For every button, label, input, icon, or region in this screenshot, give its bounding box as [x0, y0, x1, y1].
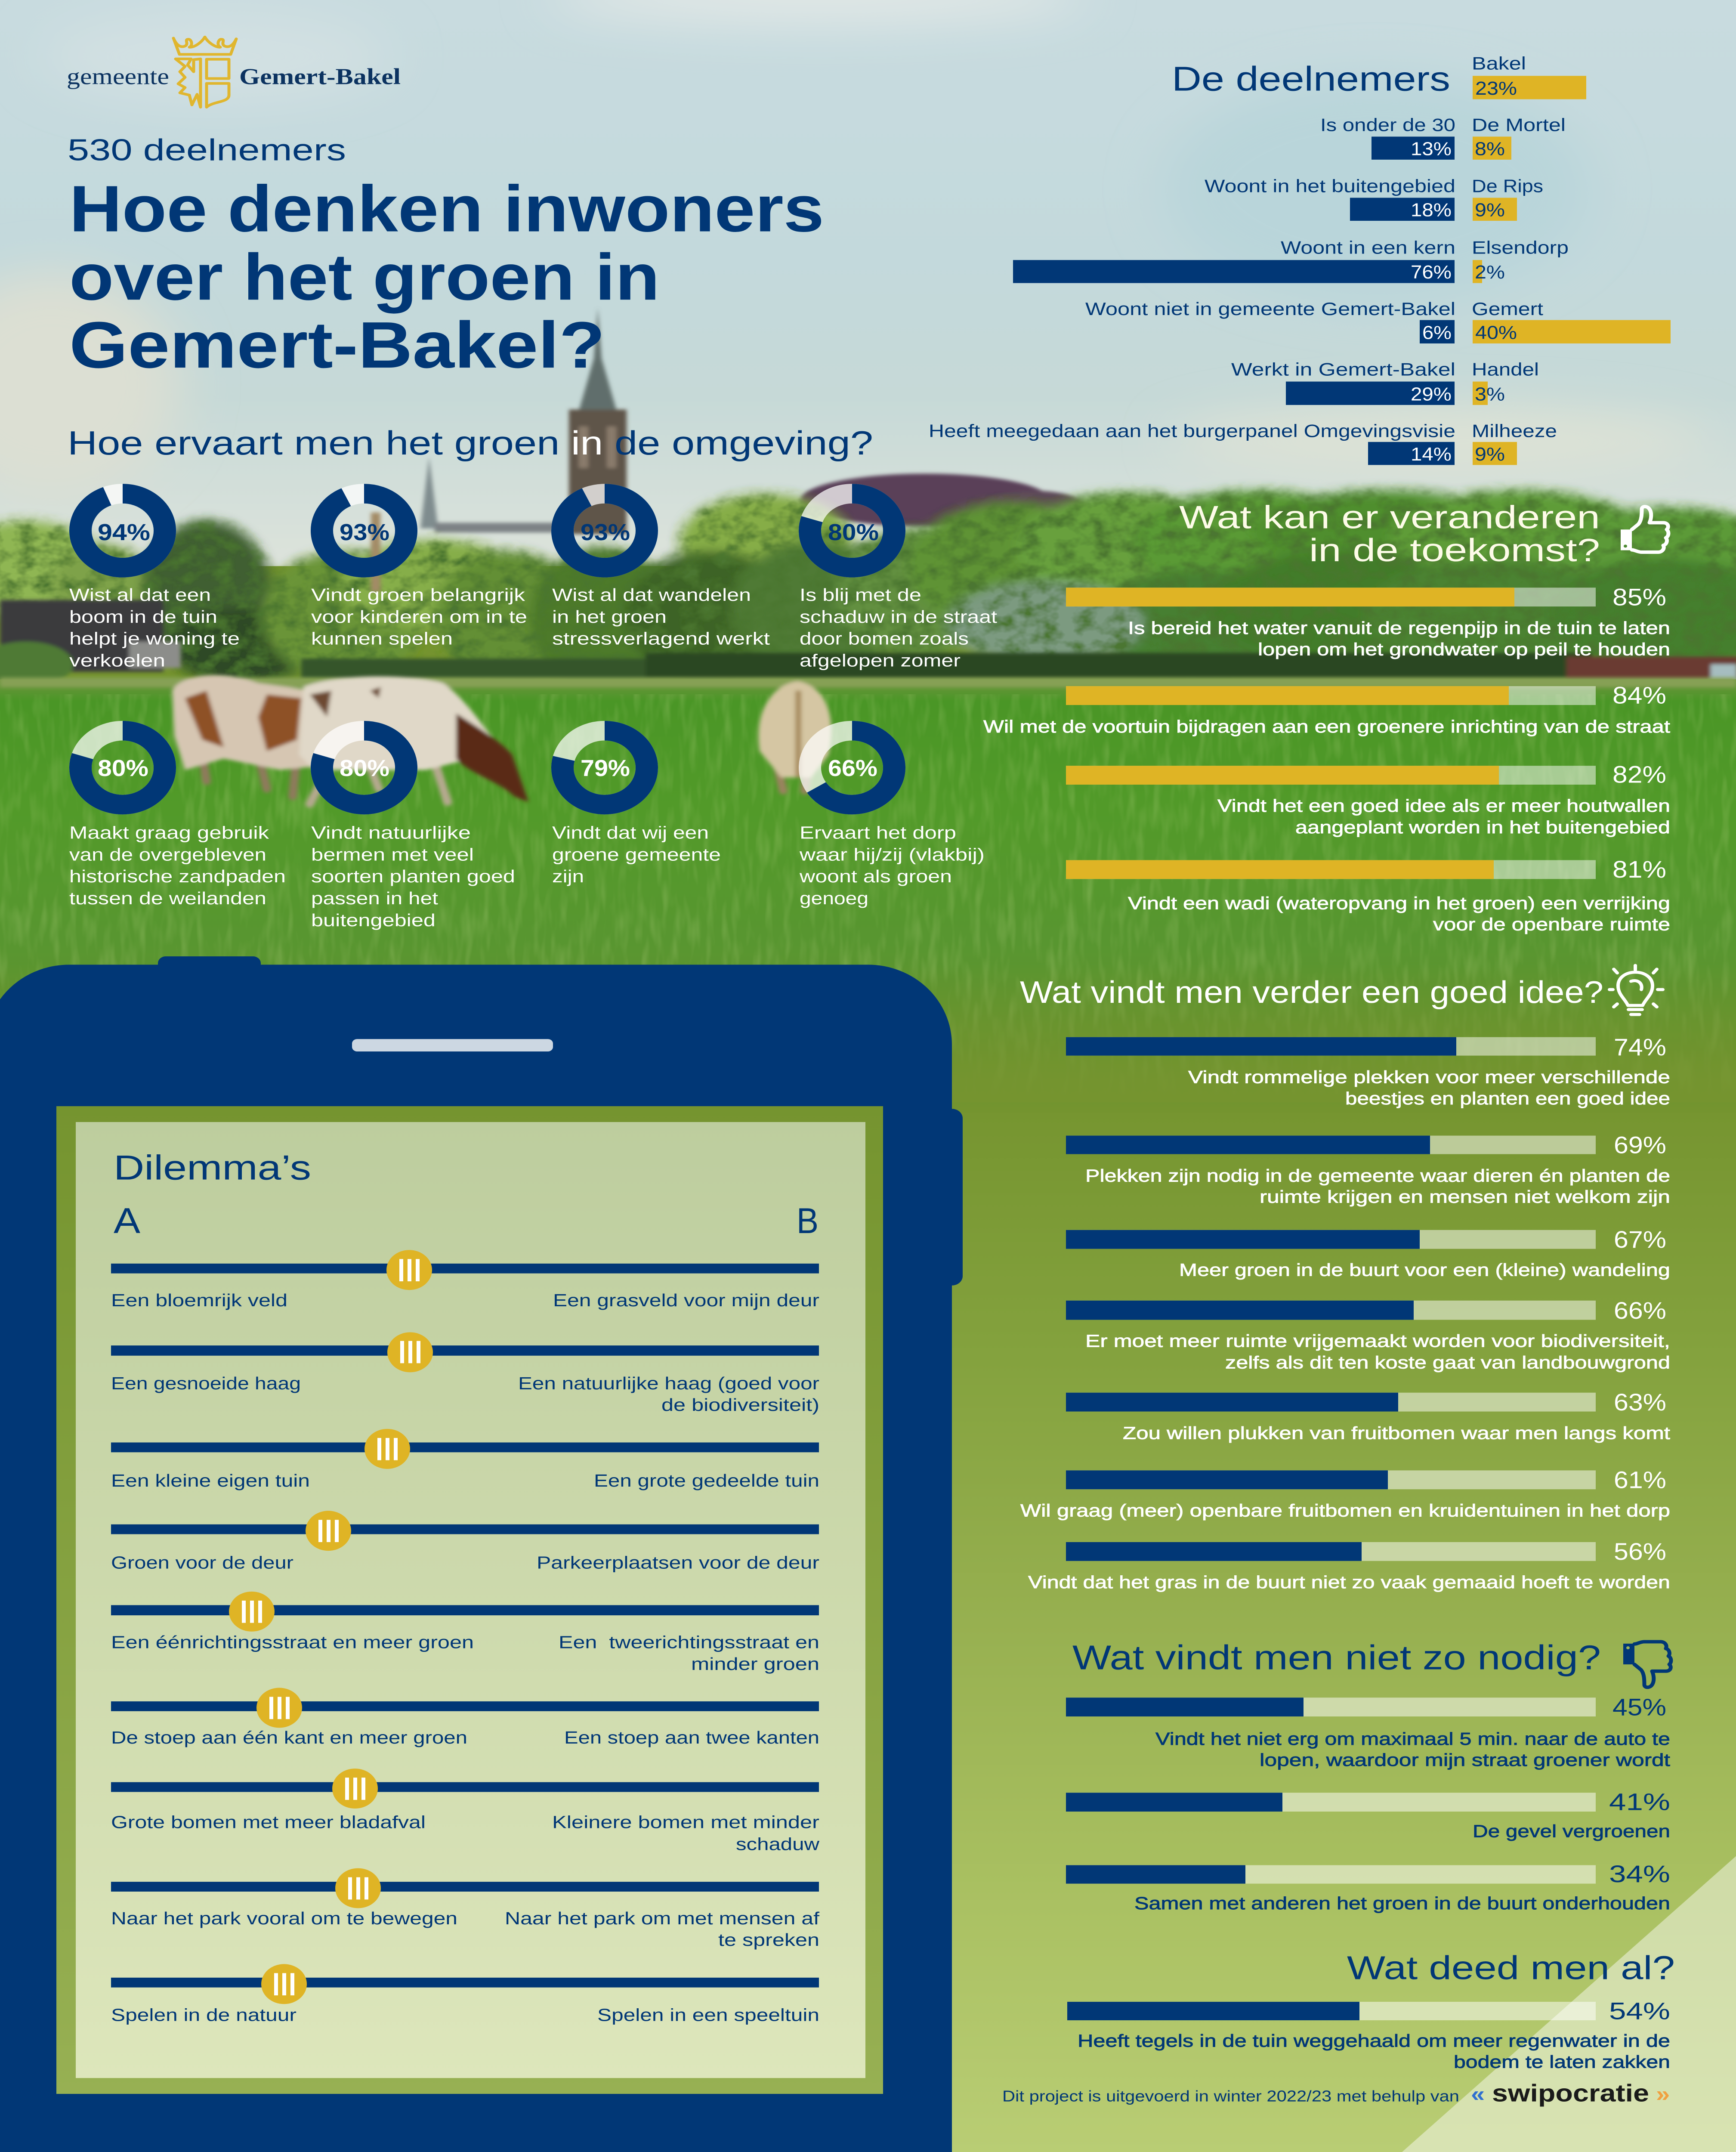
- heading: wat deed men al: Wat deed men al?: [1347, 1949, 1675, 1986]
- donut 79%: [552, 731, 721, 886]
- donut 79%: zijn: [552, 867, 584, 886]
- chart: participant village bars: 23%: [1475, 77, 1517, 99]
- bar 63%: Zou willen plukken van fruitbomen waar men langs komt: [1123, 1423, 1670, 1443]
- slider 1: Een grasveld voor mijn deur: [553, 1291, 819, 1310]
- donut 80% zandpaden: [69, 731, 286, 908]
- bar 85%: Is bereid het water vanuit de regenpijp in de tuin te laten: [1128, 618, 1670, 638]
- panel: wat kan er veranderen: [983, 500, 1670, 934]
- bar 69%: Plekken zijn nodig in de gemeente waar dieren én planten de: [1085, 1166, 1670, 1186]
- background: light triangle bottom right: [1402, 1856, 1736, 2152]
- bar 67%: [1066, 1226, 1670, 1280]
- subtitle: 530 deelnemers: 530 deelnemers: [68, 133, 346, 167]
- donut 80% bermen: [311, 731, 515, 930]
- chart: participant village bars: De Rips: [1472, 176, 1543, 196]
- label B: B: [797, 1200, 819, 1241]
- bar 85%: lopen om het grondwater op peil te houden: [1258, 640, 1670, 659]
- chart: participant village bars: Elsendorp: [1472, 237, 1569, 258]
- donut 94%: [69, 494, 240, 671]
- bar 81%: Vindt een wadi (wateropvang in het groen) een verrijking: [1128, 894, 1670, 913]
- bar 34%: 34%: [1609, 1861, 1670, 1887]
- icon: light bulb: [1609, 965, 1663, 1014]
- bar 54%: [1067, 1997, 1670, 2072]
- bar 54%: Heeft tegels in de tuin weggehaald om meer regenwater in de: [1078, 2031, 1670, 2051]
- slider 3: Een kleine eigen tuin: [111, 1471, 310, 1490]
- title: Gemert-Bakel?: [69, 308, 605, 382]
- bar 41%: De gevel vergroenen: [1473, 1821, 1670, 1841]
- heading: hoe ervaart men het groen: Hoe ervaart men het groen in de omgeving?: [68, 424, 873, 462]
- slider 2: de biodiversiteit): [661, 1395, 819, 1415]
- donut 80% zandpaden: 80%: [98, 755, 148, 781]
- bar 54%: bodem te laten zakken: [1454, 2052, 1670, 2072]
- chart: participant profile bars: 13%: [1411, 138, 1452, 159]
- bar 82%: Vindt het een goed idee als er meer houtwallen: [1217, 796, 1670, 816]
- chart: participant village bars: Bakel: [1472, 53, 1526, 74]
- bar 82%: aangeplant worden in het buitengebied: [1295, 818, 1670, 837]
- slider 8: Naar het park vooral om te bewegen: [111, 1909, 457, 1929]
- donut 66%: 66%: [828, 755, 877, 781]
- donut 80% schaduw: [800, 494, 997, 671]
- chart: participant village bars: 2%: [1475, 261, 1505, 282]
- logo: swipocratie: »: [1656, 2082, 1670, 2106]
- chart: participant village bars: Handel: [1472, 359, 1539, 380]
- bar 45%: Vindt het niet erg om maximaal 5 min. naar de auto te: [1155, 1729, 1670, 1749]
- bar 74%: 74%: [1614, 1033, 1666, 1061]
- bar 69%: 69%: [1614, 1132, 1666, 1159]
- chart: participant village bars: 9%: [1475, 199, 1505, 220]
- donut 79%: groene gemeente: [552, 845, 721, 865]
- slider 7: Kleinere bomen met minder: [552, 1812, 819, 1832]
- slider 4: Parkeerplaatsen voor de deur: [537, 1553, 819, 1573]
- slider 4: Groen voor de deur: [111, 1553, 293, 1573]
- donut 93% wandelen: [552, 494, 770, 649]
- slider 2: Een natuurlijke haag (goed voor: [518, 1373, 819, 1393]
- donut 93% kinderen: [311, 494, 527, 649]
- logo: swipocratie: «: [1471, 2082, 1485, 2106]
- donut 66%: waar hij/zij (vlakbij): [799, 845, 985, 865]
- heading: wat kan er veranderen in de toekomst: Wat kan er veranderen: [1179, 500, 1600, 535]
- donut 80% bermen: bermen met veel: [311, 845, 474, 865]
- icon: crown and shield: [173, 37, 236, 107]
- footer credit: [1002, 2080, 1670, 2107]
- slider 2: [111, 1332, 819, 1415]
- bar 67%: 67%: [1614, 1226, 1666, 1253]
- chart: participant profile bars: 6%: [1422, 322, 1452, 343]
- phone button side: [938, 1109, 963, 1286]
- donut 94%: Wist al dat een: [69, 585, 211, 605]
- panel: de deelnemers: [929, 53, 1671, 465]
- chart: participant village bars: Gemert: [1472, 299, 1544, 319]
- panel: wat deed men al: [1067, 1949, 1675, 2072]
- panel: dilemma's screen: [76, 1122, 865, 2078]
- bar 84%: 84%: [1612, 682, 1666, 709]
- bar 45%: lopen, waardoor mijn straat groener wordt: [1260, 1750, 1670, 1770]
- logo: gemeente Gemert-Bakel: gemeente: [67, 63, 169, 90]
- slider 7: Grote bomen met meer bladafval: [111, 1812, 426, 1832]
- phone body: [0, 965, 952, 2152]
- bar 82%: 82%: [1612, 761, 1666, 788]
- heading: wat vindt men niet zo nodig: Wat vindt men niet zo nodig?: [1072, 1639, 1601, 1677]
- bar 61%: 61%: [1614, 1466, 1666, 1493]
- donut 94%: 94%: [98, 519, 150, 545]
- donut 66%: Ervaart het dorp: [800, 823, 956, 843]
- donut 93% kinderen: kunnen spelen: [311, 629, 453, 649]
- chart: participant profile bars: Is onder de 30: [1320, 114, 1455, 135]
- donut 93% kinderen: Vindt groen belangrijk: [311, 585, 525, 605]
- bar 45%: 45%: [1612, 1694, 1666, 1721]
- heading: de deelnemers: De deelnemers: [1172, 60, 1450, 98]
- heading: wat vindt men verder een goed idee: Wat vindt men verder een goed idee?: [1020, 975, 1603, 1010]
- chart: participant village bars: 8%: [1475, 138, 1505, 159]
- slider 6: Een stoep aan twee kanten: [564, 1728, 819, 1748]
- background photo: church, trees, cows and meadow: [0, 0, 1736, 1113]
- chart: participant village bars: 40%: [1475, 322, 1517, 343]
- slider 5: Een éénrichtingsstraat en meer groen: [111, 1633, 474, 1652]
- bar 67%: Meer groen in de buurt voor een (kleine) wandeling: [1179, 1260, 1670, 1280]
- bar 34%: [1066, 1861, 1670, 1913]
- chart: participant profile bars: 14%: [1411, 443, 1452, 464]
- slider 8: [111, 1868, 820, 1950]
- bar 81%: voor de openbare ruimte: [1433, 915, 1670, 934]
- bar 66%: Er moet meer ruimte vrijgemaakt worden voor biodiversiteit,: [1085, 1331, 1670, 1351]
- donut 93% wandelen: in het groen: [552, 607, 667, 627]
- bar 74%: Vindt rommelige plekken voor meer verschillende: [1188, 1067, 1670, 1087]
- slider 3: [111, 1429, 819, 1490]
- bar 41%: 41%: [1609, 1788, 1670, 1815]
- donut 93% wandelen: Wist al dat wandelen: [552, 585, 751, 605]
- donut 66%: genoeg: [800, 889, 868, 908]
- phone speaker: [352, 1039, 553, 1051]
- heading: wat kan er veranderen in de toekomst: in de toekomst?: [1309, 532, 1600, 569]
- chart: participant profile bars: Werkt in Gemert-Bakel: [1231, 359, 1455, 380]
- chart: participant village bars: De Mortel: [1472, 114, 1566, 135]
- donut 80% bermen: soorten planten goed: [311, 867, 515, 886]
- donut 79%: 79%: [581, 755, 630, 781]
- chart: participant profile bars: Woont niet in gemeente Gemert-Bakel: [1085, 299, 1455, 319]
- donut 80% schaduw: schaduw in de straat: [800, 607, 997, 627]
- donut 80% zandpaden: van de overgebleven: [69, 845, 266, 865]
- slider 4: [111, 1511, 819, 1573]
- bar 63%: 63%: [1614, 1389, 1666, 1416]
- donut 80% bermen: buitengebied: [311, 911, 436, 930]
- donut 80% bermen: Vindt natuurlijke: [311, 823, 471, 843]
- bar 56%: Vindt dat het gras in de buurt niet zo vaak gemaaid hoeft te worden: [1028, 1573, 1670, 1592]
- chart: participant village bars: Milheeze: [1472, 421, 1557, 441]
- donut 93% wandelen: stressverlagend werkt: [552, 629, 770, 649]
- bar 66%: [1066, 1297, 1670, 1373]
- donut 80% bermen: 80%: [340, 755, 389, 781]
- slider 5: [111, 1592, 819, 1674]
- bar 34%: Samen met anderen het groen in de buurt onderhouden: [1134, 1894, 1670, 1913]
- title: [69, 172, 824, 382]
- bar 84%: [983, 682, 1670, 736]
- panel: wat vindt men niet zo nodig: [1066, 1639, 1671, 1913]
- chart: participant profile bars: [929, 114, 1455, 465]
- chart: participant profile bars: 29%: [1411, 383, 1452, 405]
- slider 6: De stoep aan één kant en meer groen: [111, 1728, 467, 1748]
- slider 6: [111, 1688, 819, 1748]
- bar 54%: 54%: [1609, 1997, 1670, 2024]
- donut 93% wandelen: 93%: [581, 519, 630, 545]
- donut 66%: woont als groen: [799, 867, 952, 886]
- chart: participant village bars: 3%: [1475, 383, 1505, 405]
- phone illustration: [0, 956, 963, 2152]
- chart: participant village bars: 9%: [1475, 443, 1505, 464]
- heading: dilemma's: Dilemma’s: [114, 1148, 311, 1187]
- slider 7: [111, 1769, 820, 1854]
- bar 41%: [1066, 1788, 1670, 1841]
- logo: gemeente Gemert-Bakel: Gemert-Bakel: [239, 65, 401, 90]
- bar 85%: [1066, 584, 1670, 659]
- slider 1: Een bloemrijk veld: [111, 1291, 287, 1310]
- slider 2: Een gesnoeide haag: [111, 1373, 301, 1393]
- bar 74%: beestjes en planten een goed idee: [1345, 1088, 1670, 1108]
- panel: wat vindt men verder een goed idee: [1020, 965, 1670, 1592]
- phone button top: [158, 956, 261, 979]
- bar 56%: [1028, 1538, 1670, 1592]
- bar 69%: [1066, 1132, 1670, 1207]
- phone screen bezel: [56, 1106, 883, 2094]
- slider 5: Een tweerichtingsstraat en: [559, 1633, 819, 1652]
- bar 56%: 56%: [1614, 1538, 1666, 1565]
- slider 8: te spreken: [718, 1930, 819, 1950]
- slider 9: Spelen in een speeltuin: [597, 2005, 819, 2025]
- slider 8: Naar het park om met mensen af: [505, 1909, 820, 1929]
- donut 80% zandpaden: tussen de weilanden: [69, 889, 266, 908]
- slider 9: [111, 1964, 819, 2025]
- logo: swipocratie: swipocratie: [1492, 2080, 1649, 2107]
- bar 84%: Wil met de voortuin bijdragen aan een groenere inrichting van de straat: [983, 717, 1670, 736]
- donut 80% schaduw: afgelopen zomer: [800, 651, 961, 671]
- footer credit: Dit project is uitgevoerd in winter 2022/23 met behulp van: [1002, 2088, 1459, 2105]
- bar 74%: [1066, 1033, 1670, 1108]
- bar 61%: [1020, 1466, 1670, 1521]
- title: Hoe denken inwoners: [69, 172, 824, 245]
- slider 5: minder groen: [691, 1654, 819, 1674]
- label A: A: [114, 1200, 140, 1241]
- donut 80% zandpaden: historische zandpaden: [69, 867, 286, 886]
- heading: wat kan er veranderen in de toekomst: [1179, 500, 1600, 569]
- donut 93% kinderen: voor kinderen om in te: [311, 607, 527, 627]
- bar 61%: Wil graag (meer) openbare fruitbomen en kruidentuinen in het dorp: [1020, 1501, 1670, 1521]
- panel: donut statistics: [69, 494, 997, 930]
- donut 66%: [799, 731, 985, 908]
- donut 94%: helpt je woning te: [69, 629, 240, 649]
- donut 93% kinderen: 93%: [340, 519, 389, 545]
- bar 81%: 81%: [1612, 856, 1666, 883]
- slider 7: schaduw: [736, 1834, 820, 1854]
- chart: participant profile bars: 18%: [1411, 199, 1452, 220]
- slider 1: [111, 1250, 819, 1310]
- slider 3: Een grote gedeelde tuin: [594, 1471, 819, 1490]
- bar 45%: [1066, 1694, 1670, 1770]
- donut 80% schaduw: Is blij met de: [800, 585, 921, 605]
- donut 80% schaduw: door bomen zoals: [800, 629, 969, 649]
- logo: gemeente Gemert-Bakel: [67, 37, 401, 107]
- donut 79%: Vindt dat wij een: [552, 823, 709, 843]
- title: over het groen in: [69, 240, 660, 314]
- bar 63%: [1066, 1389, 1670, 1443]
- bar 69%: ruimte krijgen en mensen niet welkom zijn: [1260, 1187, 1670, 1207]
- bar 82%: [1066, 761, 1670, 837]
- chart: participant profile bars: Heeft meegedaan aan het burgerpanel Omgevingsvisie: [929, 421, 1455, 441]
- background: lower gradient: [0, 1076, 1736, 2152]
- donut 80% zandpaden: Maakt graag gebruik: [69, 823, 269, 843]
- icon: thumbs up: [1621, 507, 1668, 552]
- donut 94%: verkoelen: [69, 651, 165, 671]
- slider 9: Spelen in de natuur: [111, 2005, 297, 2025]
- chart: participant village bars: [1472, 53, 1671, 465]
- chart: participant profile bars: Woont in een kern: [1281, 237, 1455, 258]
- icon: thumbs down: [1623, 1642, 1671, 1687]
- bar 81%: [1066, 856, 1670, 934]
- donut 80% schaduw: 80%: [828, 519, 879, 545]
- bar 66%: 66%: [1614, 1297, 1666, 1324]
- donut 80% bermen: passen in het: [311, 889, 438, 908]
- chart: participant profile bars: 76%: [1411, 261, 1452, 282]
- chart: participant profile bars: Woont in het buitengebied: [1205, 176, 1455, 196]
- donut 94%: boom in de tuin: [69, 607, 217, 627]
- bar 66%: zelfs als dit ten koste gaat van landbouwgrond: [1225, 1353, 1670, 1373]
- bar 85%: 85%: [1612, 584, 1666, 611]
